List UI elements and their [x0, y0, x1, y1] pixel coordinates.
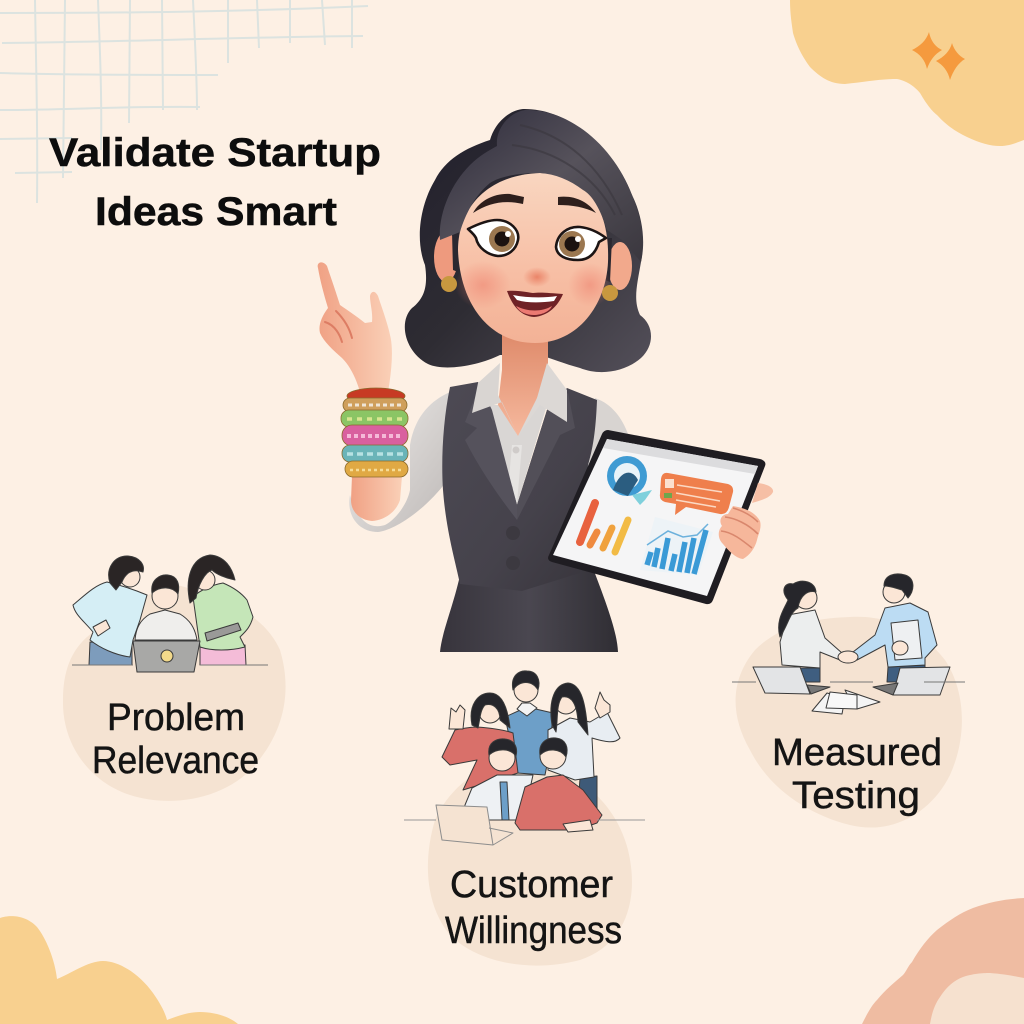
eyebrows	[473, 194, 524, 213]
blob	[428, 759, 632, 966]
blouse buttons	[512, 446, 520, 454]
vest	[442, 382, 597, 591]
desk line	[404, 819, 645, 821]
right woman	[577, 776, 597, 820]
outer blob	[862, 898, 1024, 1024]
laptops	[753, 667, 810, 694]
right sleeve	[585, 398, 628, 490]
tablet	[205, 623, 241, 641]
blob	[790, 0, 1024, 146]
label: Relevance	[92, 740, 259, 782]
line and bar chart	[640, 517, 713, 575]
tablet screen	[553, 439, 758, 596]
label: Measured	[772, 732, 942, 774]
collar right	[518, 363, 567, 436]
back hair	[405, 109, 651, 372]
thumb behind tablet	[752, 483, 773, 503]
buttons	[506, 526, 520, 540]
hair strand lines	[512, 125, 622, 215]
eye right	[556, 227, 606, 260]
title: Validate Startup	[49, 131, 381, 175]
label	[92, 697, 259, 782]
front hair swoop	[440, 110, 643, 262]
man	[135, 610, 197, 640]
curled fingers	[325, 311, 352, 342]
bangle beads	[348, 404, 402, 406]
woman sweater	[780, 610, 842, 668]
skirt	[440, 555, 618, 652]
eye left	[468, 220, 518, 256]
earrings	[441, 276, 457, 292]
hands on desk	[563, 820, 593, 832]
folder	[891, 620, 922, 660]
corner blob: top right with sparkles	[790, 0, 1024, 146]
main character: businesswoman with tablet	[318, 109, 773, 652]
blouse placket	[508, 445, 522, 503]
collar left	[472, 363, 518, 436]
hand on folder	[892, 641, 908, 655]
title	[49, 131, 381, 234]
step: measured testing	[732, 574, 965, 828]
corner blob: bottom left	[0, 916, 238, 1024]
speech bubble	[660, 473, 733, 515]
mouth	[507, 291, 563, 317]
icon: sparkle small	[936, 43, 965, 80]
papers	[812, 693, 845, 714]
illustration: team of five	[436, 671, 620, 845]
left front man	[462, 775, 533, 820]
cheeks	[455, 261, 511, 309]
corner blob: bottom right	[862, 898, 1024, 1024]
decorative grid top left	[0, 0, 368, 203]
label: Willingness	[445, 910, 622, 952]
nose	[523, 267, 551, 287]
step: problem relevance	[63, 555, 286, 801]
left woman	[89, 642, 132, 665]
left sleeve	[349, 392, 450, 532]
right woman	[200, 645, 246, 665]
man pants	[887, 665, 925, 682]
neck	[498, 335, 548, 436]
inner blob	[930, 973, 1024, 1024]
illustration: handshake over laptops	[753, 574, 950, 714]
lapel right	[517, 393, 575, 520]
right front man	[515, 775, 602, 830]
bar chart	[580, 503, 628, 552]
handshake	[838, 651, 858, 663]
man shirt	[853, 603, 937, 667]
bangles	[341, 388, 408, 477]
face	[458, 173, 608, 343]
label: Problem	[107, 697, 245, 739]
forearm	[351, 476, 402, 521]
label	[772, 732, 942, 817]
browser bar	[603, 439, 758, 474]
laptop	[133, 641, 200, 672]
pointing hand	[318, 262, 392, 392]
left woman	[442, 727, 518, 790]
step: customer willingness	[404, 671, 645, 966]
blob	[63, 583, 286, 801]
blouse	[490, 405, 547, 505]
blob	[736, 617, 962, 828]
back man	[505, 707, 553, 775]
tablet	[548, 430, 765, 604]
ears	[434, 232, 458, 282]
hair strips next to face	[452, 232, 612, 282]
label	[445, 864, 622, 952]
illustration: three colleagues at laptop	[73, 555, 253, 672]
tablet body	[548, 430, 765, 604]
label: Testing	[792, 775, 920, 817]
title: Ideas Smart	[95, 190, 337, 234]
icon: target badge	[607, 456, 652, 505]
desk line	[732, 681, 965, 683]
laptop	[436, 805, 513, 845]
desk line	[72, 664, 268, 666]
label: Customer	[450, 864, 613, 906]
hand holding tablet	[719, 506, 761, 559]
lapel left	[465, 385, 517, 520]
woman pants	[798, 668, 820, 682]
icon: sparkle large	[912, 32, 942, 69]
